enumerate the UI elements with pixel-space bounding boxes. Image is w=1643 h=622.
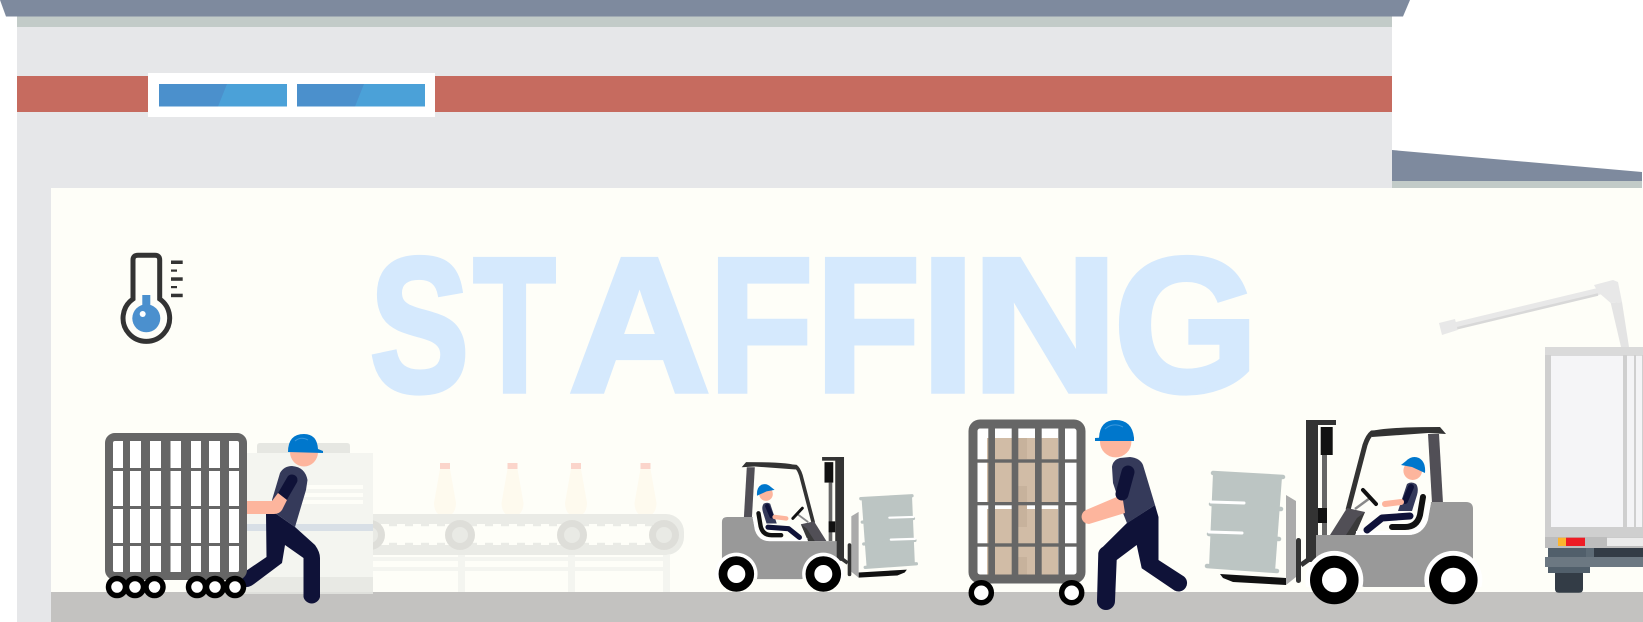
rollers <box>355 520 679 550</box>
helmet <box>288 434 323 453</box>
title: A <box>569 219 710 432</box>
helmet highlight <box>295 438 308 441</box>
clerestory window <box>148 73 435 117</box>
belt scallops <box>373 525 673 544</box>
sleeve <box>1122 472 1128 494</box>
torso <box>272 466 308 527</box>
annex roof <box>1392 150 1642 188</box>
body <box>1316 502 1473 587</box>
wheels <box>1305 551 1482 598</box>
dock arm <box>1439 280 1629 347</box>
helmet <box>1095 420 1134 441</box>
arm <box>1082 494 1125 524</box>
title: F <box>816 219 920 432</box>
seat edge <box>754 518 807 540</box>
tire <box>1555 573 1583 593</box>
title: N <box>972 219 1118 432</box>
seat <box>1392 497 1423 527</box>
forklift, large <box>1207 420 1482 598</box>
processing machine <box>234 443 373 594</box>
mast <box>1301 420 1336 565</box>
driver <box>757 484 799 537</box>
head <box>290 438 318 466</box>
roof fascia <box>17 16 1392 27</box>
belt opening <box>373 524 673 545</box>
floor <box>51 592 1643 622</box>
helmet highlight <box>1105 425 1123 429</box>
cab <box>1330 427 1446 535</box>
seat edge <box>1356 503 1429 533</box>
chassis <box>1548 548 1586 557</box>
legs <box>240 513 320 603</box>
steering wheel <box>1355 490 1376 509</box>
title: S <box>370 219 469 432</box>
cage wheels <box>108 578 244 596</box>
title: G <box>1114 219 1258 432</box>
bottles <box>434 463 656 514</box>
delivery truck <box>1545 347 1643 593</box>
worker pushing cage, right <box>1082 420 1187 610</box>
cage wheels <box>971 583 1082 603</box>
warehouse interior <box>51 188 1643 592</box>
driver <box>1367 457 1425 530</box>
conveyor frame <box>373 555 670 592</box>
roll cage, left <box>108 437 244 596</box>
seat <box>758 513 781 535</box>
red stripe <box>17 76 1392 112</box>
conveyor line <box>350 463 684 592</box>
roll cage with boxes <box>971 424 1082 603</box>
roof <box>0 0 1410 16</box>
title: T <box>474 219 556 432</box>
icon: thermometer <box>123 255 183 341</box>
worker pushing cage, left <box>240 434 323 603</box>
boxes <box>987 438 1058 575</box>
sleeve <box>281 480 292 499</box>
title: F <box>709 219 813 432</box>
body <box>722 517 837 579</box>
title: I <box>921 219 975 432</box>
steering wheel <box>793 508 808 522</box>
forks <box>1220 574 1286 585</box>
mast <box>822 457 848 563</box>
forks <box>859 570 907 578</box>
torso <box>1112 457 1155 523</box>
rear lights <box>1545 537 1643 548</box>
arm <box>246 493 287 514</box>
load <box>1207 473 1283 572</box>
legs <box>1097 505 1187 610</box>
forklift, small <box>715 457 916 587</box>
load <box>861 496 916 568</box>
cab <box>742 462 826 541</box>
wheels <box>715 553 845 587</box>
conveyor belt <box>350 514 684 555</box>
head <box>1100 426 1131 457</box>
truck box <box>1545 347 1643 537</box>
